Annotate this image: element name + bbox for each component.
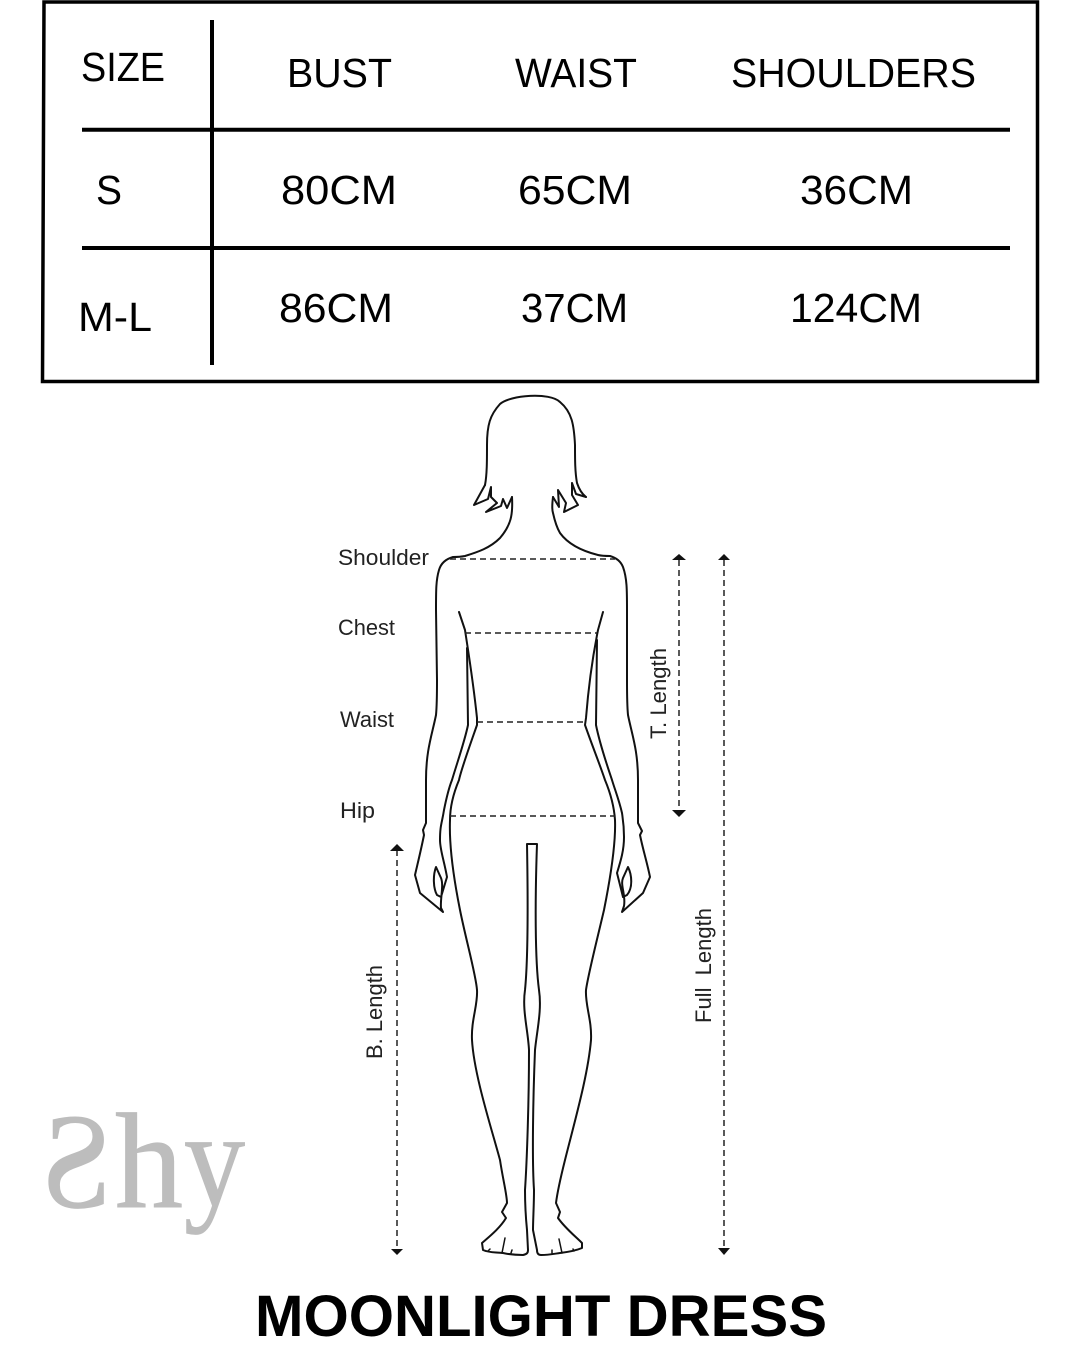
measurement arrowheads [390,554,730,1255]
size table: BUST [287,50,392,96]
brand logo: h [115,1087,183,1237]
measurement labels: Full Length [691,908,716,1023]
size table: WAIST [515,50,637,96]
body outline figure [415,396,650,1255]
measurement labels: T. Length [646,648,671,739]
size table: SHOULDERS [731,50,976,96]
size table: SIZE [81,44,165,90]
measurement labels: Hip [340,798,375,823]
measurement labels [338,545,716,1059]
size table: 124CM [790,285,922,331]
size table: 86CM [279,285,393,331]
brand logo [41,1085,245,1237]
size table: 65CM [518,167,632,213]
measurement labels: Chest [338,615,395,640]
measurement labels: B. Length [362,965,387,1059]
product title: MOONLIGHT DRESS [255,1284,827,1349]
size table [42,2,1038,382]
size table: M-L [78,294,152,340]
size table: 36CM [800,167,913,213]
measurement labels: Shoulder [338,545,429,570]
measurement labels: Waist [340,707,394,732]
size table: 80CM [281,167,397,213]
brand logo: y [184,1085,245,1235]
brand logo: S [41,1085,112,1237]
size table: 37CM [521,285,628,331]
measurement lines [397,559,724,1248]
size table: S [96,167,122,213]
